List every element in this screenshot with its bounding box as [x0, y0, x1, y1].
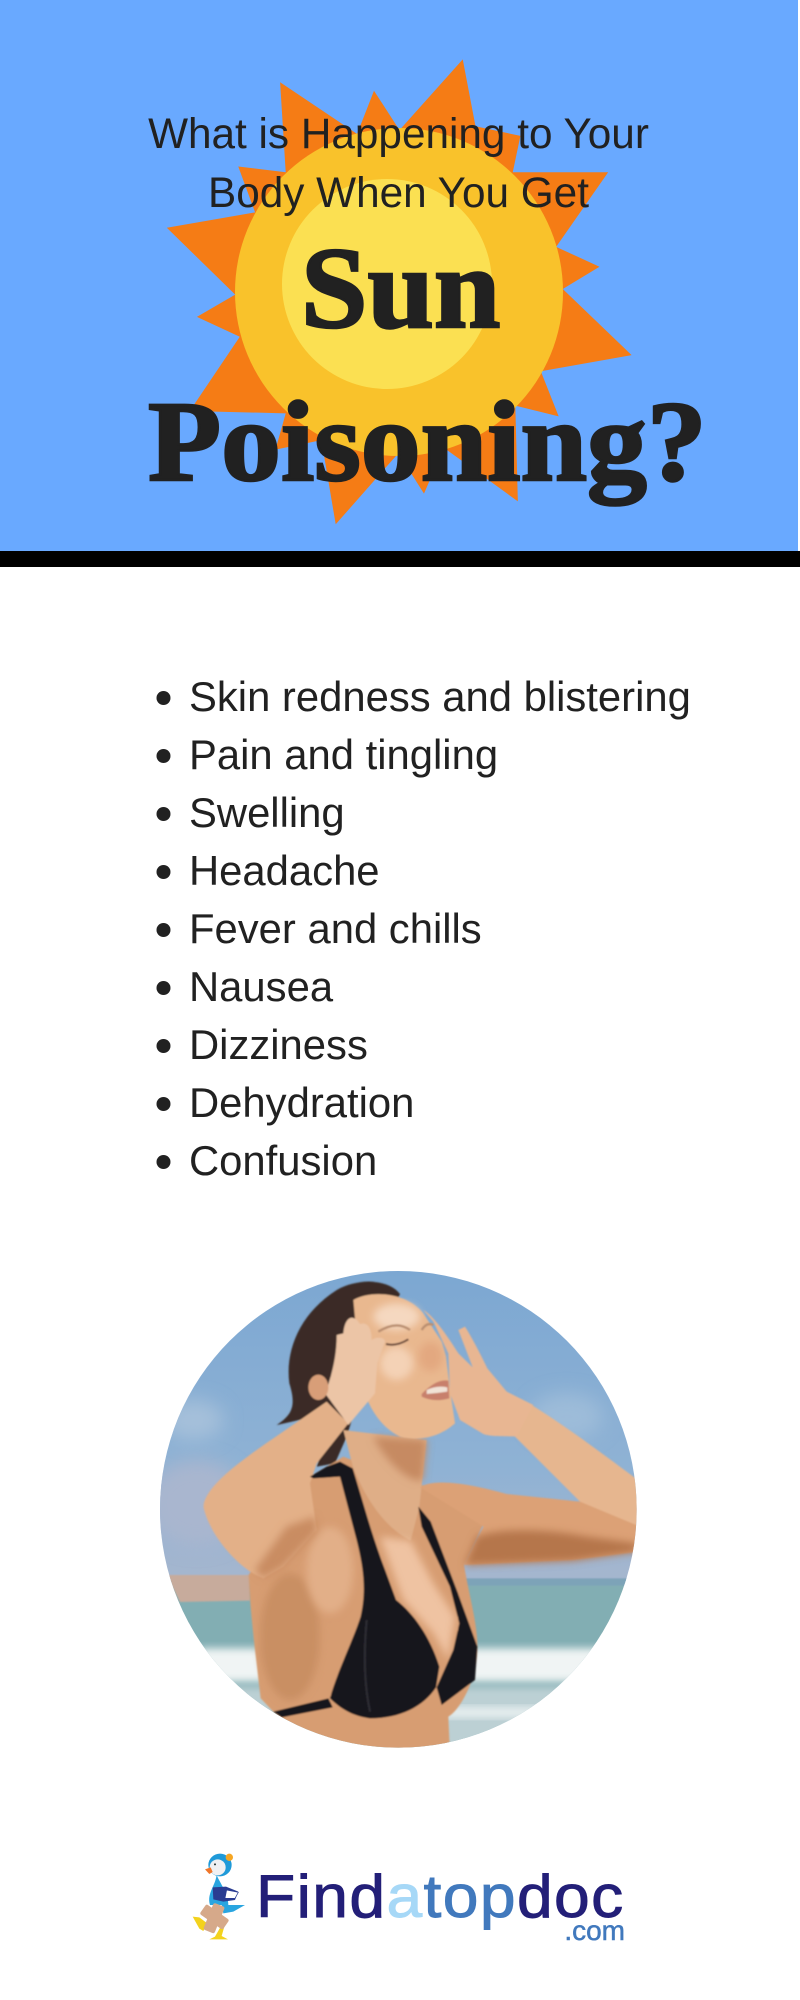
list text: Swelling	[189, 789, 345, 836]
list text: Fever and chills	[189, 905, 482, 952]
list text	[189, 673, 691, 1184]
nose	[419, 1342, 443, 1371]
right hand	[423, 1310, 533, 1437]
title intro	[148, 110, 649, 216]
.com: .com	[564, 1915, 625, 1946]
logo	[192, 1854, 625, 1946]
list text: Nausea	[189, 963, 334, 1010]
list text: Skin redness and blistering	[189, 673, 691, 720]
icon: bird mascot	[193, 1854, 245, 1939]
title: main	[148, 225, 707, 505]
list text: Headache	[189, 847, 380, 894]
bird legs	[193, 1917, 207, 1931]
bandage	[200, 1903, 229, 1934]
bird wing	[213, 1887, 238, 1902]
sun rays	[167, 59, 632, 524]
upper chest highlight	[380, 1537, 455, 1660]
list text: Dizziness	[189, 1021, 368, 1068]
face	[353, 1294, 455, 1439]
header banner	[0, 0, 800, 567]
sky	[160, 1271, 637, 1584]
right forearm	[515, 1404, 640, 1527]
ear	[308, 1375, 328, 1400]
right upper arm	[420, 1482, 640, 1565]
title intro: What is Happening to Your	[148, 110, 649, 157]
title: main: Sun	[301, 225, 500, 353]
sea	[170, 1580, 626, 1748]
sky blue background	[0, 0, 798, 552]
left hand	[325, 1318, 385, 1425]
figure	[203, 1282, 640, 1753]
left arm	[203, 1402, 348, 1578]
list text: Dehydration	[189, 1079, 414, 1126]
wordmark: Findatopdoc	[256, 1864, 625, 1931]
title intro: Body When You Get	[208, 169, 589, 216]
black divider bar	[0, 551, 800, 567]
list text: Pain and tingling	[189, 731, 498, 778]
torso shading	[260, 1573, 320, 1700]
list bullets	[156, 691, 170, 1169]
sun outer disc	[235, 128, 563, 456]
symptom list	[156, 673, 691, 1184]
distant shore	[167, 1575, 250, 1602]
closed eye	[386, 1339, 408, 1345]
icon: sun	[167, 59, 632, 524]
waves	[200, 1648, 610, 1682]
hair	[277, 1282, 400, 1467]
open mouth	[422, 1380, 449, 1400]
photo: woman on the beach holding her head	[160, 1271, 637, 1748]
list text: Confusion	[189, 1137, 377, 1184]
title: main: Poisoning?	[148, 380, 707, 505]
neck	[343, 1430, 427, 1541]
forehead shine	[373, 1303, 420, 1330]
bikini	[273, 1462, 477, 1718]
sun inner disc	[282, 179, 492, 389]
bird head	[208, 1854, 232, 1876]
bird body	[209, 1875, 228, 1905]
torso	[249, 1457, 487, 1753]
